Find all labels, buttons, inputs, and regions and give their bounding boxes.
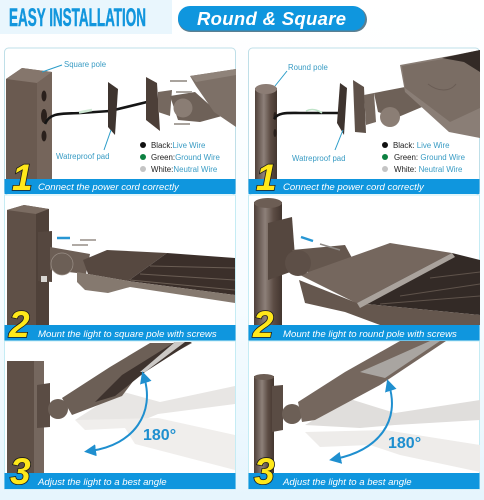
caption bar [248, 473, 480, 489]
wire legend [140, 141, 220, 174]
panel: left step 1 [4, 48, 236, 198]
pole label: Square pole [64, 60, 106, 69]
caption bar: Mount the light to round pole with screws [283, 329, 457, 340]
caption bar [4, 473, 236, 489]
step number: 3 [254, 451, 275, 492]
wire [45, 102, 147, 124]
wire legend: Green:Ground Wire [151, 153, 220, 162]
caption bar: Connect the power cord correctly [38, 182, 180, 193]
caption bar: Connect the power cord correctly [283, 182, 425, 193]
caption bar: Mount the light to square pole with screws [38, 329, 217, 340]
header band: easy installation: EASY INSTALLATION [9, 4, 146, 32]
pole label [42, 60, 106, 72]
step number: 2 [8, 304, 30, 345]
panel: right step 1 [248, 48, 480, 198]
icon: round pole with lamp [254, 341, 446, 474]
step number: 3 [10, 451, 31, 492]
title pill: round and square [178, 6, 367, 32]
panel: left step 2 [4, 195, 236, 345]
wire legend: White:Neutral Wire [151, 165, 218, 174]
pad label [292, 130, 345, 163]
angle arrow [90, 377, 147, 451]
wire legend: White: Neutral Wire [394, 165, 463, 174]
icon: waterproof pad [108, 82, 118, 135]
caption bar [4, 179, 236, 194]
pole label: Round pole [288, 63, 328, 72]
wire legend: Black: Live Wire [393, 141, 450, 150]
icon: square pole with lamp [7, 205, 235, 326]
icon: round pole with lamp [254, 198, 480, 326]
title pill: round and square: Round & Square [197, 8, 346, 29]
caption bar [248, 179, 480, 194]
pole label [275, 63, 328, 86]
pad label [56, 130, 111, 161]
caption bar [248, 325, 480, 341]
wire legend [382, 141, 466, 174]
ghost lamp positions [75, 386, 235, 470]
icon: round pole [255, 84, 277, 179]
panel: right step 3 [248, 341, 480, 492]
icon: waterproof pad [337, 83, 347, 135]
caption bar [4, 325, 236, 341]
icon: square pole [6, 68, 52, 179]
icon: screws and arrow [301, 237, 340, 250]
pad label: Watreproof pad [56, 152, 109, 161]
step number: 2 [252, 304, 274, 345]
icon: lamp bracket and arm [146, 69, 236, 131]
pad label: Watreproof pad [292, 154, 345, 163]
step number: 1 [256, 157, 277, 198]
icon: screws and arrow [57, 238, 96, 245]
icon: square pole with lamp [7, 342, 192, 473]
angle label: 180° [388, 435, 421, 452]
icon: lamp bracket and head [353, 50, 480, 138]
panel: left step 3 [4, 341, 236, 492]
angle arrow [335, 385, 392, 459]
panel: right step 2 [248, 195, 480, 345]
caption bar: Adjust the light to a best angle [37, 477, 167, 488]
ghost lamp positions [305, 399, 480, 472]
caption bar: Adjust the light to a best angle [282, 477, 412, 488]
header band: easy installation [0, 0, 172, 34]
angle label: 180° [143, 427, 176, 444]
wire legend: Black:Live Wire [151, 141, 206, 150]
wire [274, 113, 345, 119]
wire legend: Green: Ground Wire [394, 153, 466, 162]
step number: 1 [12, 157, 33, 198]
